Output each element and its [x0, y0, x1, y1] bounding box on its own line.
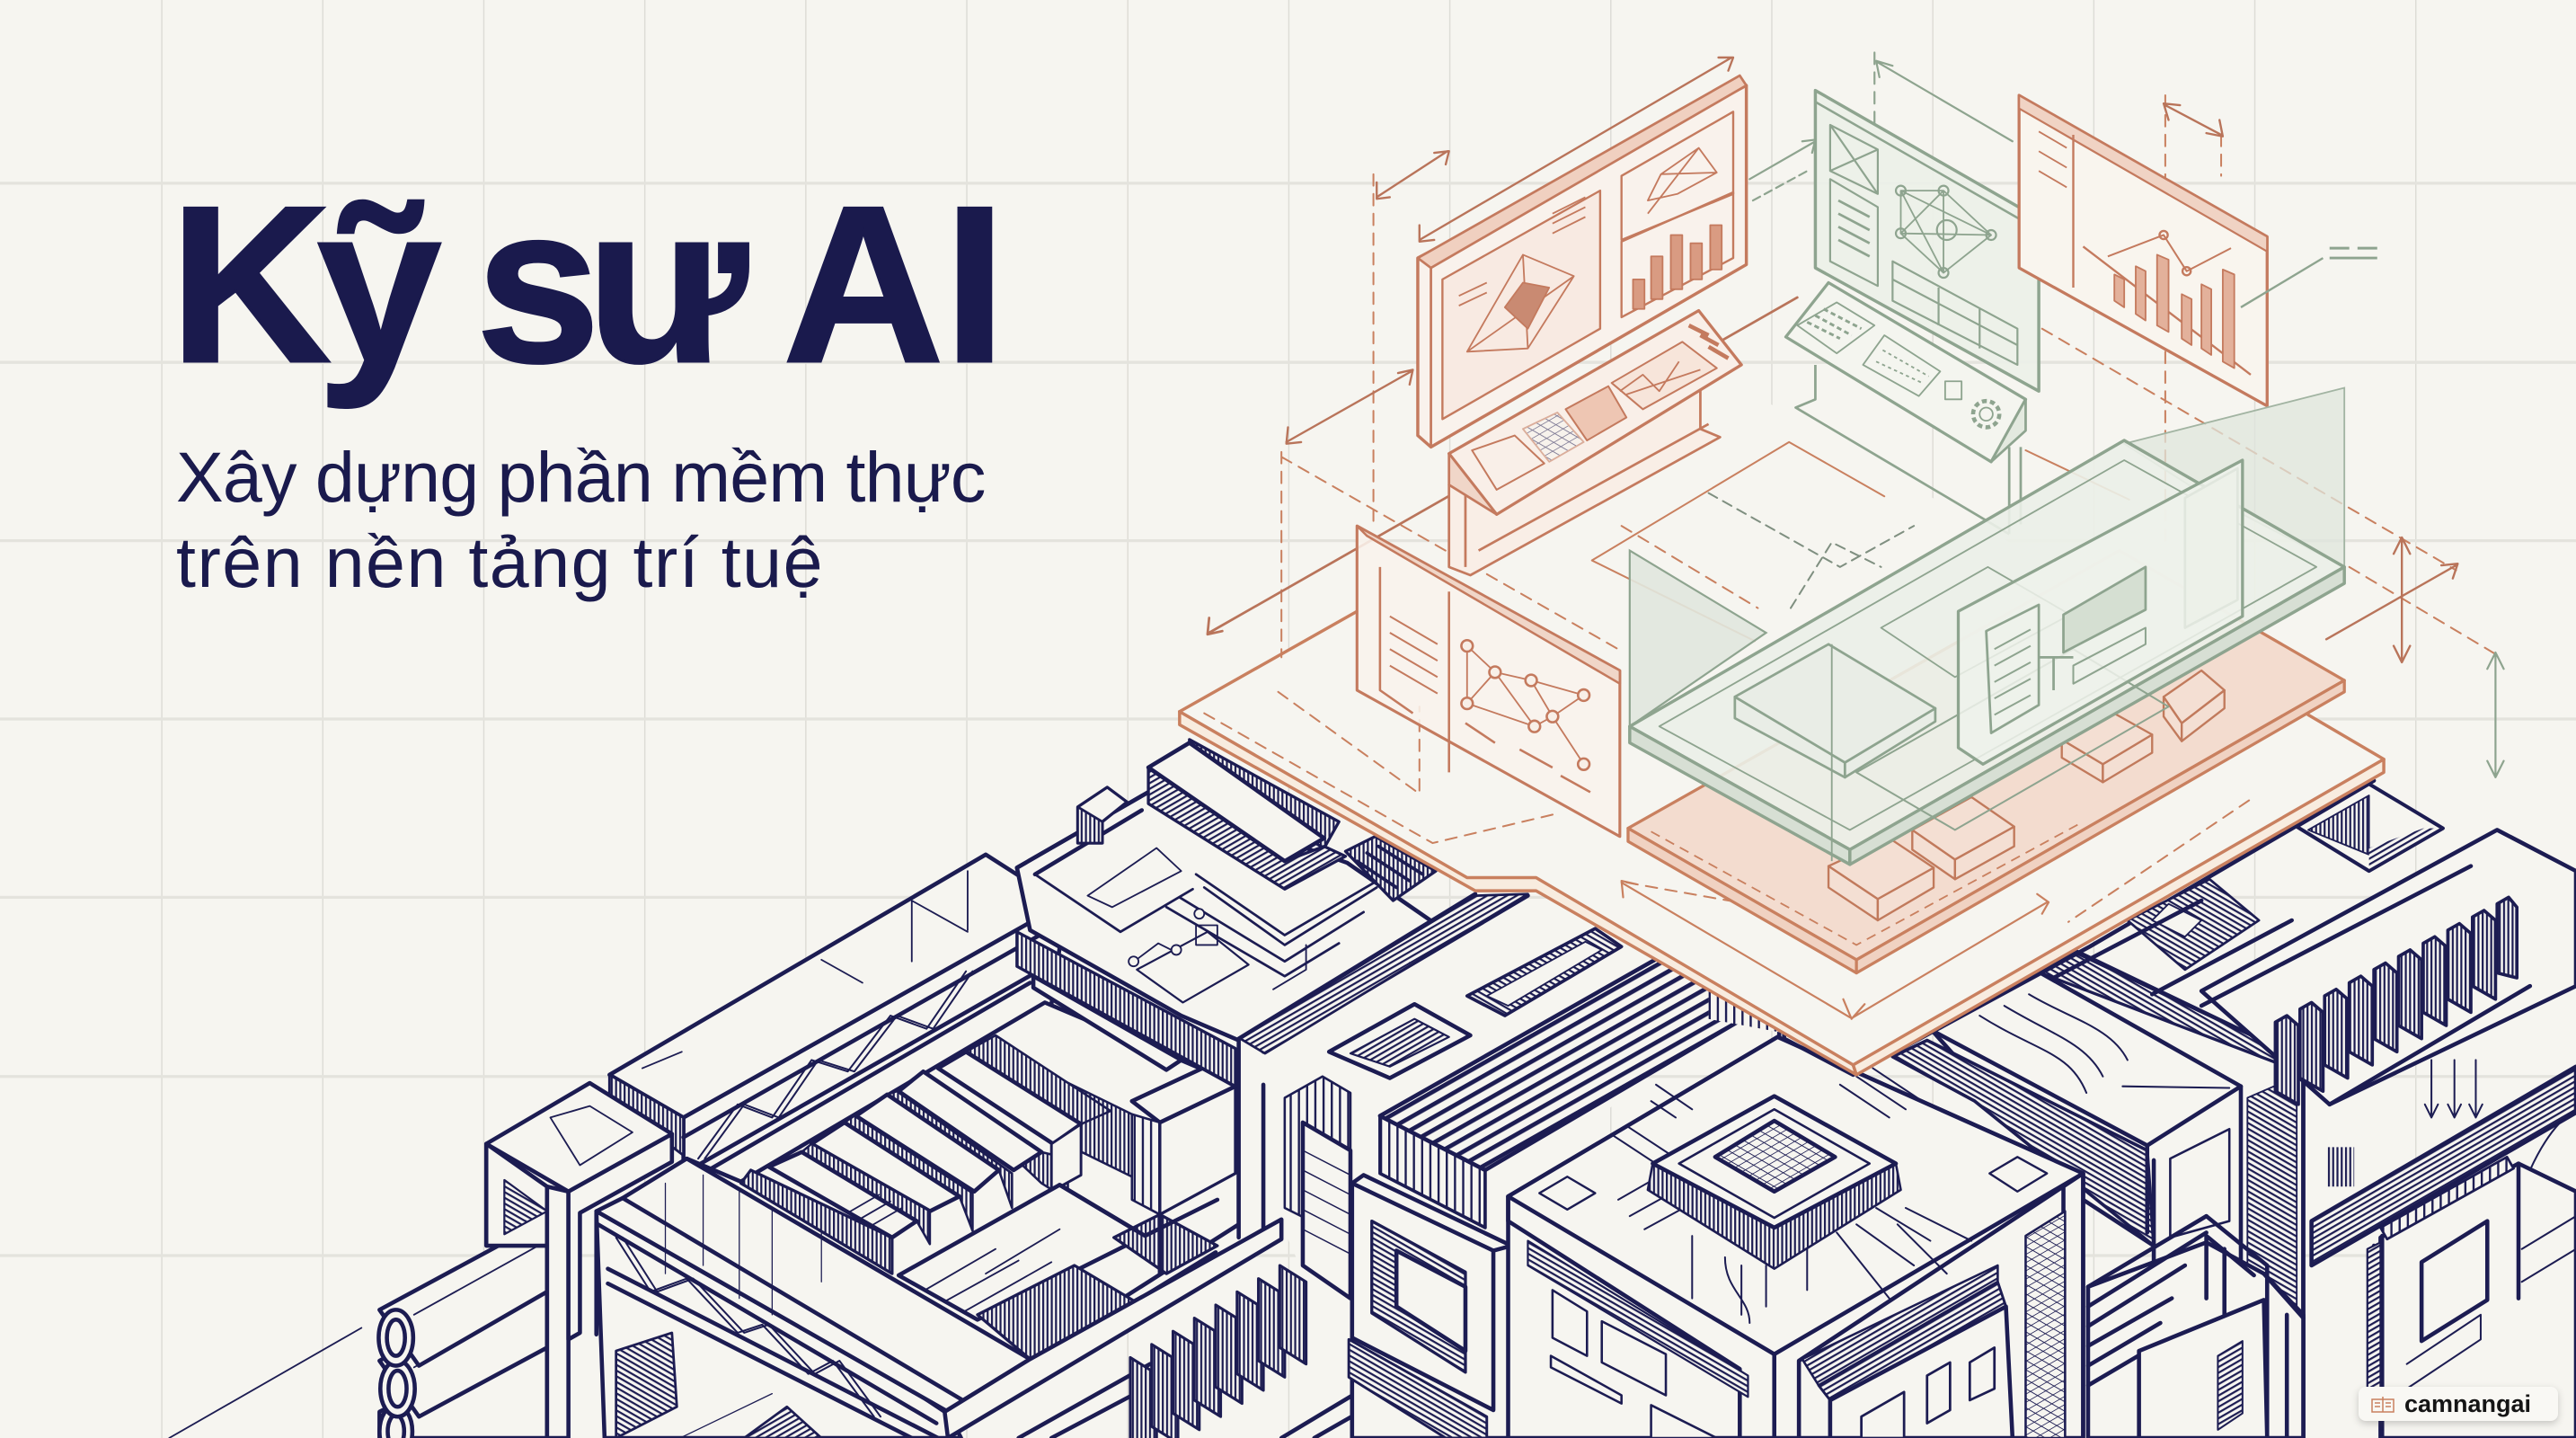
green chip module inside tray — [1735, 644, 1935, 861]
green dimension arrows — [1749, 53, 2504, 777]
green translucent left wall — [1630, 551, 1766, 726]
green vertical screen inside tray — [1959, 460, 2243, 764]
bottom fin stack — [1019, 1265, 1372, 1438]
green translucent back wall — [2124, 388, 2344, 567]
right heat sink fins — [2201, 830, 2576, 1186]
center well with memory bars — [686, 976, 1239, 1412]
right platform with traces — [1892, 952, 2303, 1438]
watermark badge — [2359, 1387, 2558, 1421]
subtitle: trên nền tảng trí tuệ — [176, 522, 824, 602]
panel: lower left orange network screen — [1357, 526, 1620, 837]
silhouette edges under the plate — [1682, 781, 2443, 1075]
lower beam with truss — [597, 1158, 1030, 1438]
board with traces — [1017, 787, 1438, 1087]
thin diagonal guide line — [169, 1327, 361, 1438]
outer orange base plate — [1180, 329, 2495, 1075]
framed hatch panel — [1349, 1175, 1511, 1438]
subtitle: Xây dựng phần mềm thực — [176, 437, 986, 517]
main center heat sink — [1380, 944, 1779, 1228]
isometric hardware base: navy line drawing — [169, 740, 2576, 1438]
green glass tray — [1630, 440, 2344, 865]
bottom right processor board — [2312, 1067, 2576, 1438]
subtitle — [176, 437, 986, 602]
orange console with stand — [1449, 311, 1741, 575]
upper heat sink module — [1148, 740, 1436, 901]
right lower nested block — [2088, 1216, 2303, 1438]
title: Kỹ sư AI — [170, 159, 1005, 409]
orange raised plate — [1628, 551, 2344, 973]
mid-level thin rhombus and dashed drafting lines — [1281, 95, 2221, 657]
tube conduits and column block — [378, 1083, 672, 1438]
green console with stand — [1786, 283, 2025, 534]
chip tower — [1509, 1037, 2083, 1438]
central block with recess — [1239, 894, 1676, 1299]
icon: open book — [2371, 1397, 2395, 1413]
beam crossing the lower center — [944, 1220, 1281, 1438]
panel: top right orange bar chart screen — [2019, 95, 2377, 406]
upper left beam with truss — [609, 855, 1063, 1184]
brand name: camnangai — [2404, 1390, 2531, 1417]
panel: top orange dashboard screen — [1418, 75, 1747, 447]
panel: top green network screen — [1815, 91, 2039, 391]
dimension arrows — [1208, 58, 2457, 662]
orange modules on plate — [1828, 670, 2225, 920]
